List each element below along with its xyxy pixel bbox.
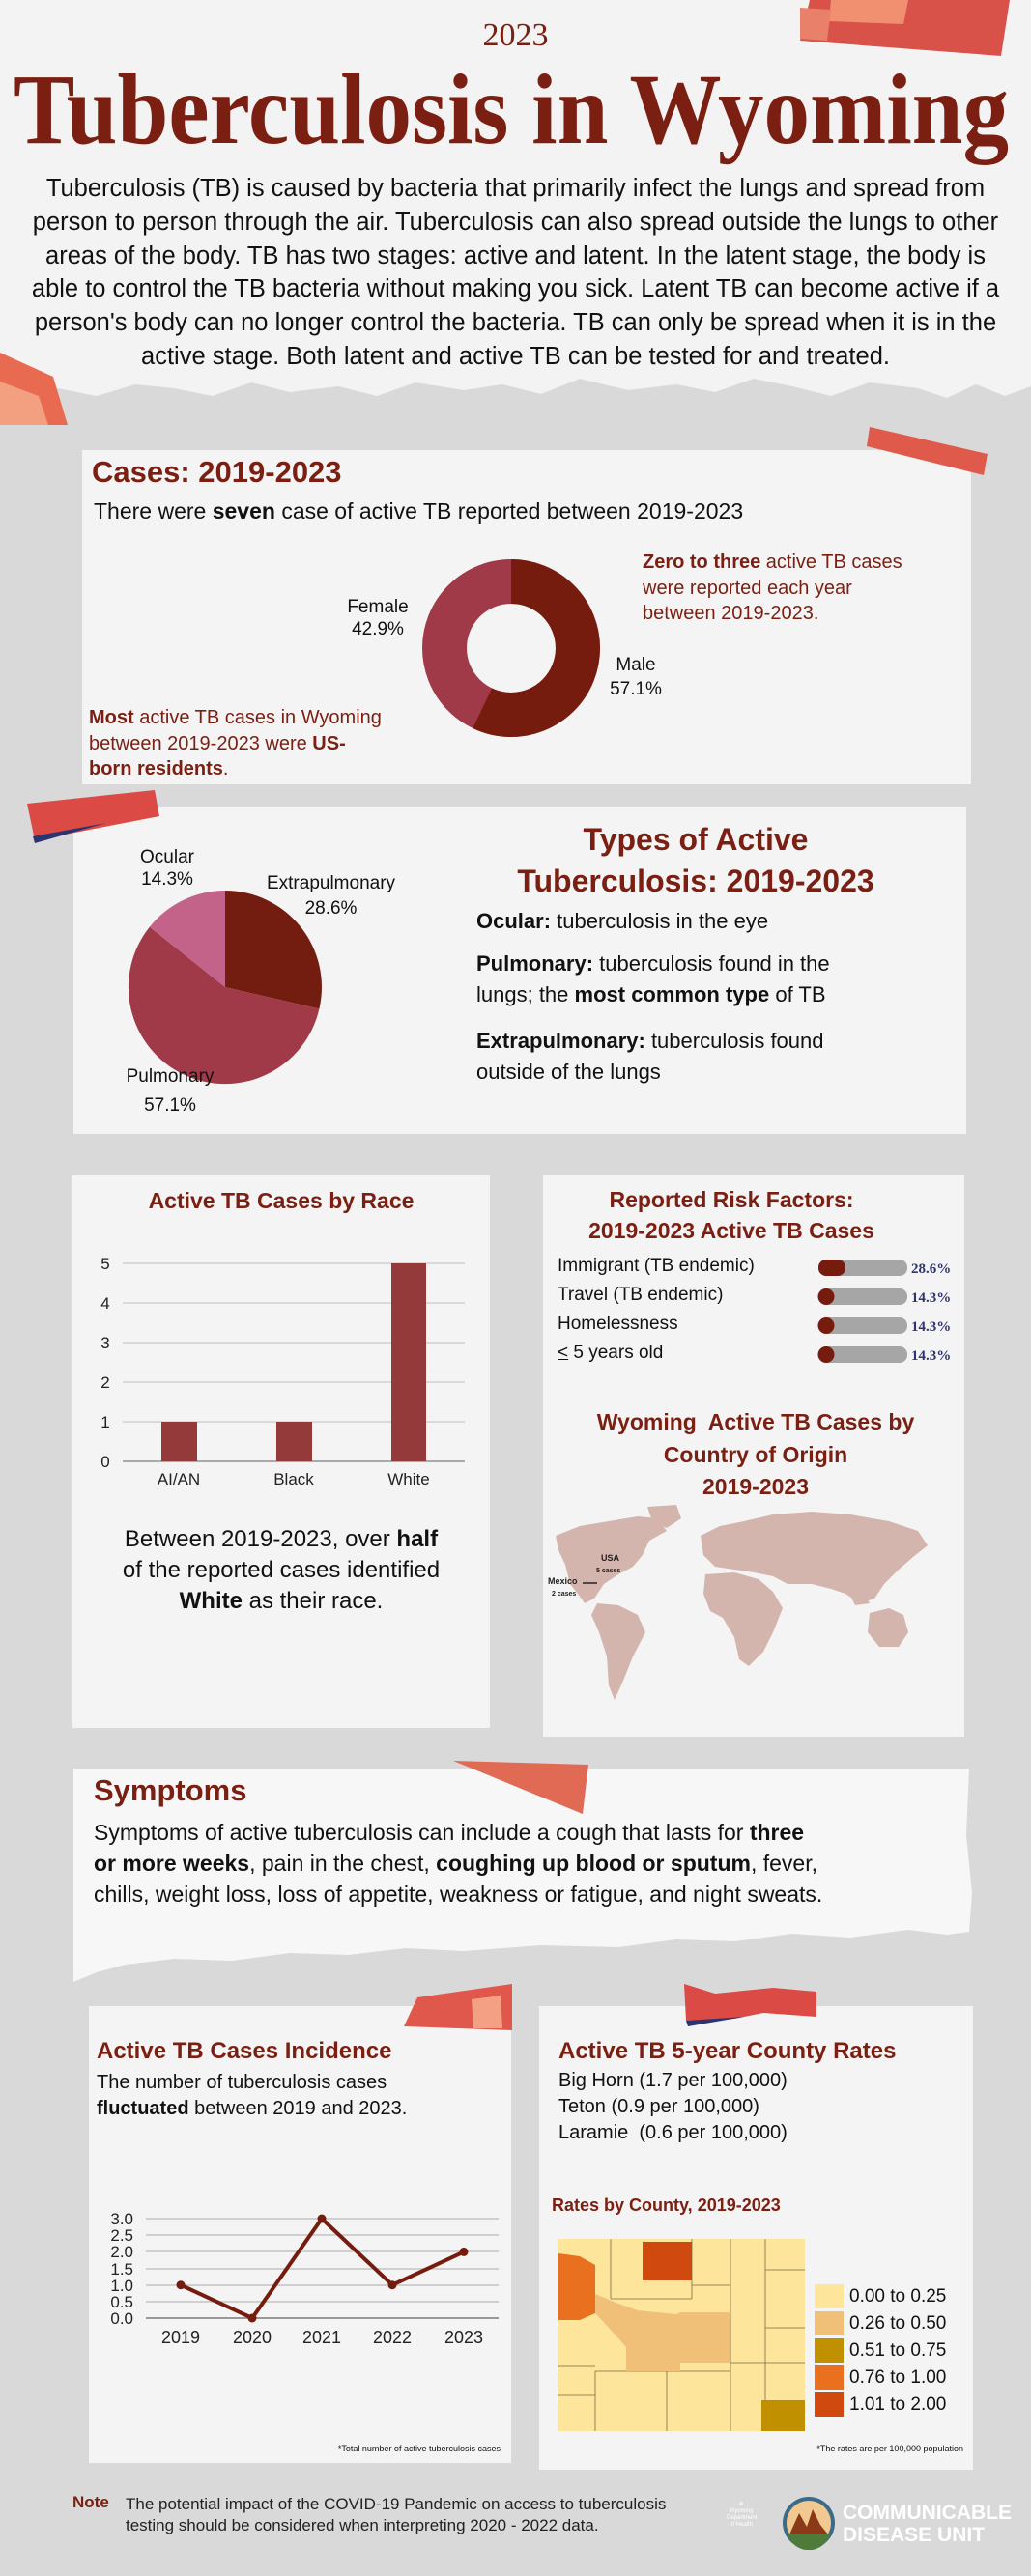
legend: county map: 0.76 to 1.00 <box>849 2367 946 2388</box>
intro paragraph: able to control the TB bacteria without making you sick. Latent TB can become active if a <box>32 275 999 302</box>
line chart: incidence: 2020 <box>233 2328 272 2347</box>
label: ocular: Ocular <box>140 847 194 867</box>
line chart: incidence: 1.5 <box>110 2260 133 2279</box>
logo: WDH <box>727 2502 758 2528</box>
line chart: incidence: 2.0 <box>110 2243 133 2261</box>
heading: risk factors <box>588 1187 874 1243</box>
text: symptoms <box>94 1820 822 1907</box>
risk factor rows: 14.3% <box>911 1348 951 1364</box>
label: extrapulmonary: Extrapulmonary <box>267 873 395 893</box>
label: female <box>347 597 409 639</box>
line chart: incidence: 2.5 <box>110 2226 133 2245</box>
label: extrapulmonary <box>267 873 395 919</box>
year: 2023 <box>483 17 549 53</box>
line chart: incidence: 3.0 <box>110 2210 133 2228</box>
pie chart: types <box>128 891 322 1084</box>
heading: country of origin: Country of Origin <box>664 1441 847 1466</box>
world map: USA <box>601 1553 620 1563</box>
definitions: lungs; the most common type of TB <box>476 982 826 1006</box>
line chart: incidence <box>110 2210 499 2347</box>
text: incidence: fluctuated between 2019 and 2023. <box>97 2098 407 2119</box>
label: pulmonary: 57.1% <box>144 1095 196 1116</box>
donut chart: sex <box>422 559 600 737</box>
legend: county map: 0.00 to 0.25 <box>849 2286 946 2307</box>
heading: country of origin <box>597 1409 914 1499</box>
callout: zero to three: between 2019-2023. <box>643 603 818 624</box>
risk factor rows <box>558 1256 951 1364</box>
callout: zero to three: were reported each year <box>643 578 852 599</box>
world map: Mexico <box>548 1576 578 1586</box>
heading: types: Types of Active <box>584 822 808 857</box>
logo: WDH: ✲ <box>738 2502 744 2507</box>
text: race summary: White as their race. <box>180 1588 383 1614</box>
label: pulmonary: Pulmonary <box>127 1066 214 1087</box>
heading: cases: Cases: 2019-2023 <box>92 455 342 489</box>
text: county rates: Big Horn (1.7 per 100,000) <box>558 2070 788 2091</box>
footer note: testing should be considered when interpreting 2020 - 2022 data. <box>126 2516 599 2534</box>
risk factor rows: Travel (TB endemic) <box>558 1285 723 1305</box>
callout: US-born: between 2019-2023 were US- <box>89 732 346 753</box>
legend: county map <box>815 2284 946 2417</box>
header background <box>0 0 1031 398</box>
legend: county map: 1.01 to 2.00 <box>849 2394 946 2415</box>
label: ocular: 14.3% <box>141 869 193 890</box>
logo: WDH: of Health <box>730 2522 753 2528</box>
footnote: incidence: *Total number of active tuberculosis cases <box>338 2444 501 2453</box>
logo: WDH: Wyoming <box>730 2508 753 2514</box>
bar chart: race: 2 <box>100 1373 110 1392</box>
label: male <box>610 655 662 699</box>
bar chart: race: 1 <box>100 1413 110 1431</box>
heading: county rates: Active TB 5-year County Rates <box>558 2038 896 2064</box>
bar chart: race <box>100 1255 465 1488</box>
decoration: left tape <box>0 353 68 425</box>
line chart: incidence: 1.0 <box>110 2277 133 2295</box>
definitions: outside of the lungs <box>476 1060 661 1084</box>
definitions <box>476 909 830 1084</box>
bar chart: race: Black <box>273 1470 314 1488</box>
callout: zero to three <box>643 552 902 624</box>
world map <box>548 1505 928 1700</box>
risk factor rows: 14.3% <box>911 1319 951 1335</box>
label: extrapulmonary: 28.6% <box>305 898 357 919</box>
decoration: top-right tape <box>800 0 1010 56</box>
logo: WDH: Department <box>727 2515 757 2521</box>
line chart: incidence: 0.5 <box>110 2293 133 2311</box>
risk factor rows: 28.6% <box>911 1261 951 1277</box>
decoration: symptoms triangle <box>453 1761 588 1814</box>
bar chart: race: 4 <box>100 1294 110 1313</box>
text: county rates <box>558 2070 788 2143</box>
definitions: Extrapulmonary: tuberculosis found <box>476 1029 823 1053</box>
bar chart: race: 0 <box>100 1453 110 1471</box>
line chart: incidence: 2019 <box>161 2328 200 2347</box>
callout: US-born <box>89 707 382 779</box>
callout: zero to three: Zero to three active TB cases <box>643 552 902 573</box>
heading: symptoms: Symptoms <box>94 1773 246 1807</box>
text: symptoms: or more weeks, pain in the chest, coughing up blood or sputum, fever, <box>94 1851 817 1876</box>
footer note: Note <box>72 2493 109 2511</box>
label: pulmonary <box>127 1066 215 1116</box>
text: symptoms: Symptoms of active tuberculosis can include a cough that lasts for three <box>94 1820 804 1845</box>
choropleth map: Wyoming <box>558 2239 805 2431</box>
heading: rates by county: Rates by County, 2019-2023 <box>552 2195 781 2215</box>
panel: race <box>72 1175 490 1728</box>
decoration: county tape <box>684 1984 816 2026</box>
panel: county rates <box>539 2006 973 2470</box>
risk factor rows: 14.3% <box>911 1290 951 1306</box>
label: male: Male <box>616 655 656 675</box>
text: symptoms: chills, weight loss, loss of appetite, weakness or fatigue, and night sweats. <box>94 1882 822 1907</box>
heading: incidence: Active TB Cases Incidence <box>97 2038 391 2064</box>
label: ocular <box>140 847 194 890</box>
risk factor rows: < 5 years old <box>558 1343 663 1363</box>
label: female: Female <box>347 597 409 617</box>
footer note: The potential impact of the COVID-19 Pandemic on access to tuberculosis <box>126 2495 666 2513</box>
intro paragraph: Tuberculosis (TB) is caused by bacteria that primarily infect the lungs and spread from <box>46 175 985 202</box>
panel: risk factors & map <box>543 1175 964 1737</box>
footer note <box>72 2493 666 2534</box>
bar chart: race: 5 <box>100 1255 110 1273</box>
text: incidence: The number of tuberculosis cases <box>97 2072 387 2093</box>
heading: country of origin: Wyoming Active TB Cases by <box>597 1409 914 1434</box>
text: incidence <box>97 2072 407 2119</box>
text: county rates: Laramie (0.6 per 100,000) <box>558 2122 788 2143</box>
bar chart: race: AI/AN <box>158 1470 200 1488</box>
heading: race: Active TB Cases by Race <box>149 1188 414 1213</box>
intro paragraph: active stage. Both latent and active TB can be tested for and treated. <box>141 343 890 370</box>
logo: communicable disease unit <box>783 2497 1012 2550</box>
panel: incidence <box>89 2006 511 2463</box>
legend: county map: 0.51 to 0.75 <box>849 2340 946 2361</box>
world map: 5 cases <box>596 1568 620 1574</box>
heading: types <box>517 822 874 898</box>
decoration: incidence tape <box>404 1984 512 2030</box>
logo: communicable disease unit: DISEASE UNIT <box>843 2524 985 2546</box>
world map: 2 cases <box>552 1591 576 1598</box>
heading: country of origin: 2019-2023 <box>702 1474 809 1499</box>
decoration: cases tape <box>867 427 988 475</box>
line chart: incidence: 2022 <box>373 2328 412 2347</box>
text: county rates: Teton (0.9 per 100,000) <box>558 2096 759 2117</box>
heading: risk factors: 2019-2023 Active TB Cases <box>588 1218 874 1243</box>
risk factor rows: Homelessness <box>558 1314 678 1334</box>
bar chart: race: White <box>387 1470 430 1488</box>
logo: communicable disease unit: COMMUNICABLE <box>843 2502 1012 2524</box>
intro paragraph <box>32 175 999 370</box>
heading: risk factors: Reported Risk Factors: <box>609 1187 854 1212</box>
callout: US-born: Most active TB cases in Wyoming <box>89 707 382 728</box>
text: race summary: of the reported cases identified <box>123 1557 440 1583</box>
footnote: rates: *The rates are per 100,000 population <box>816 2444 963 2453</box>
bar chart: race: 3 <box>100 1334 110 1352</box>
text: race summary <box>123 1526 440 1614</box>
heading: types: Tuberculosis: 2019-2023 <box>517 863 874 898</box>
decoration: types tape <box>27 790 159 843</box>
label: female: 42.9% <box>352 619 404 639</box>
line chart: incidence: 0.0 <box>110 2309 133 2328</box>
callout: US-born: born residents. <box>89 758 228 779</box>
text: race summary: Between 2019-2023, over half <box>125 1526 438 1552</box>
intro paragraph: areas of the body. TB has two stages: active and latent. In the latent stage, the body is <box>45 242 986 269</box>
definitions: Pulmonary: tuberculosis found in the <box>476 951 830 976</box>
text: seven cases: There were seven case of active TB reported between 2019-2023 <box>94 498 743 524</box>
definitions: Ocular: tuberculosis in the eye <box>476 909 768 933</box>
panel: symptoms <box>73 1769 972 1982</box>
panel: types of active TB <box>73 807 966 1134</box>
intro paragraph: person to person through the air. Tuberculosis can also spread outside the lungs to other <box>33 209 998 236</box>
intro paragraph: person's body can no longer control the bacteria. TB can only be spread when it is in the <box>35 309 996 336</box>
panel: cases 2019-2023 <box>82 450 971 784</box>
line chart: incidence: 2021 <box>302 2328 341 2347</box>
legend: county map: 0.26 to 0.50 <box>849 2313 946 2334</box>
risk factor rows: Immigrant (TB endemic) <box>558 1256 755 1276</box>
label: male: 57.1% <box>610 679 662 699</box>
line chart: incidence: 2023 <box>444 2328 483 2347</box>
